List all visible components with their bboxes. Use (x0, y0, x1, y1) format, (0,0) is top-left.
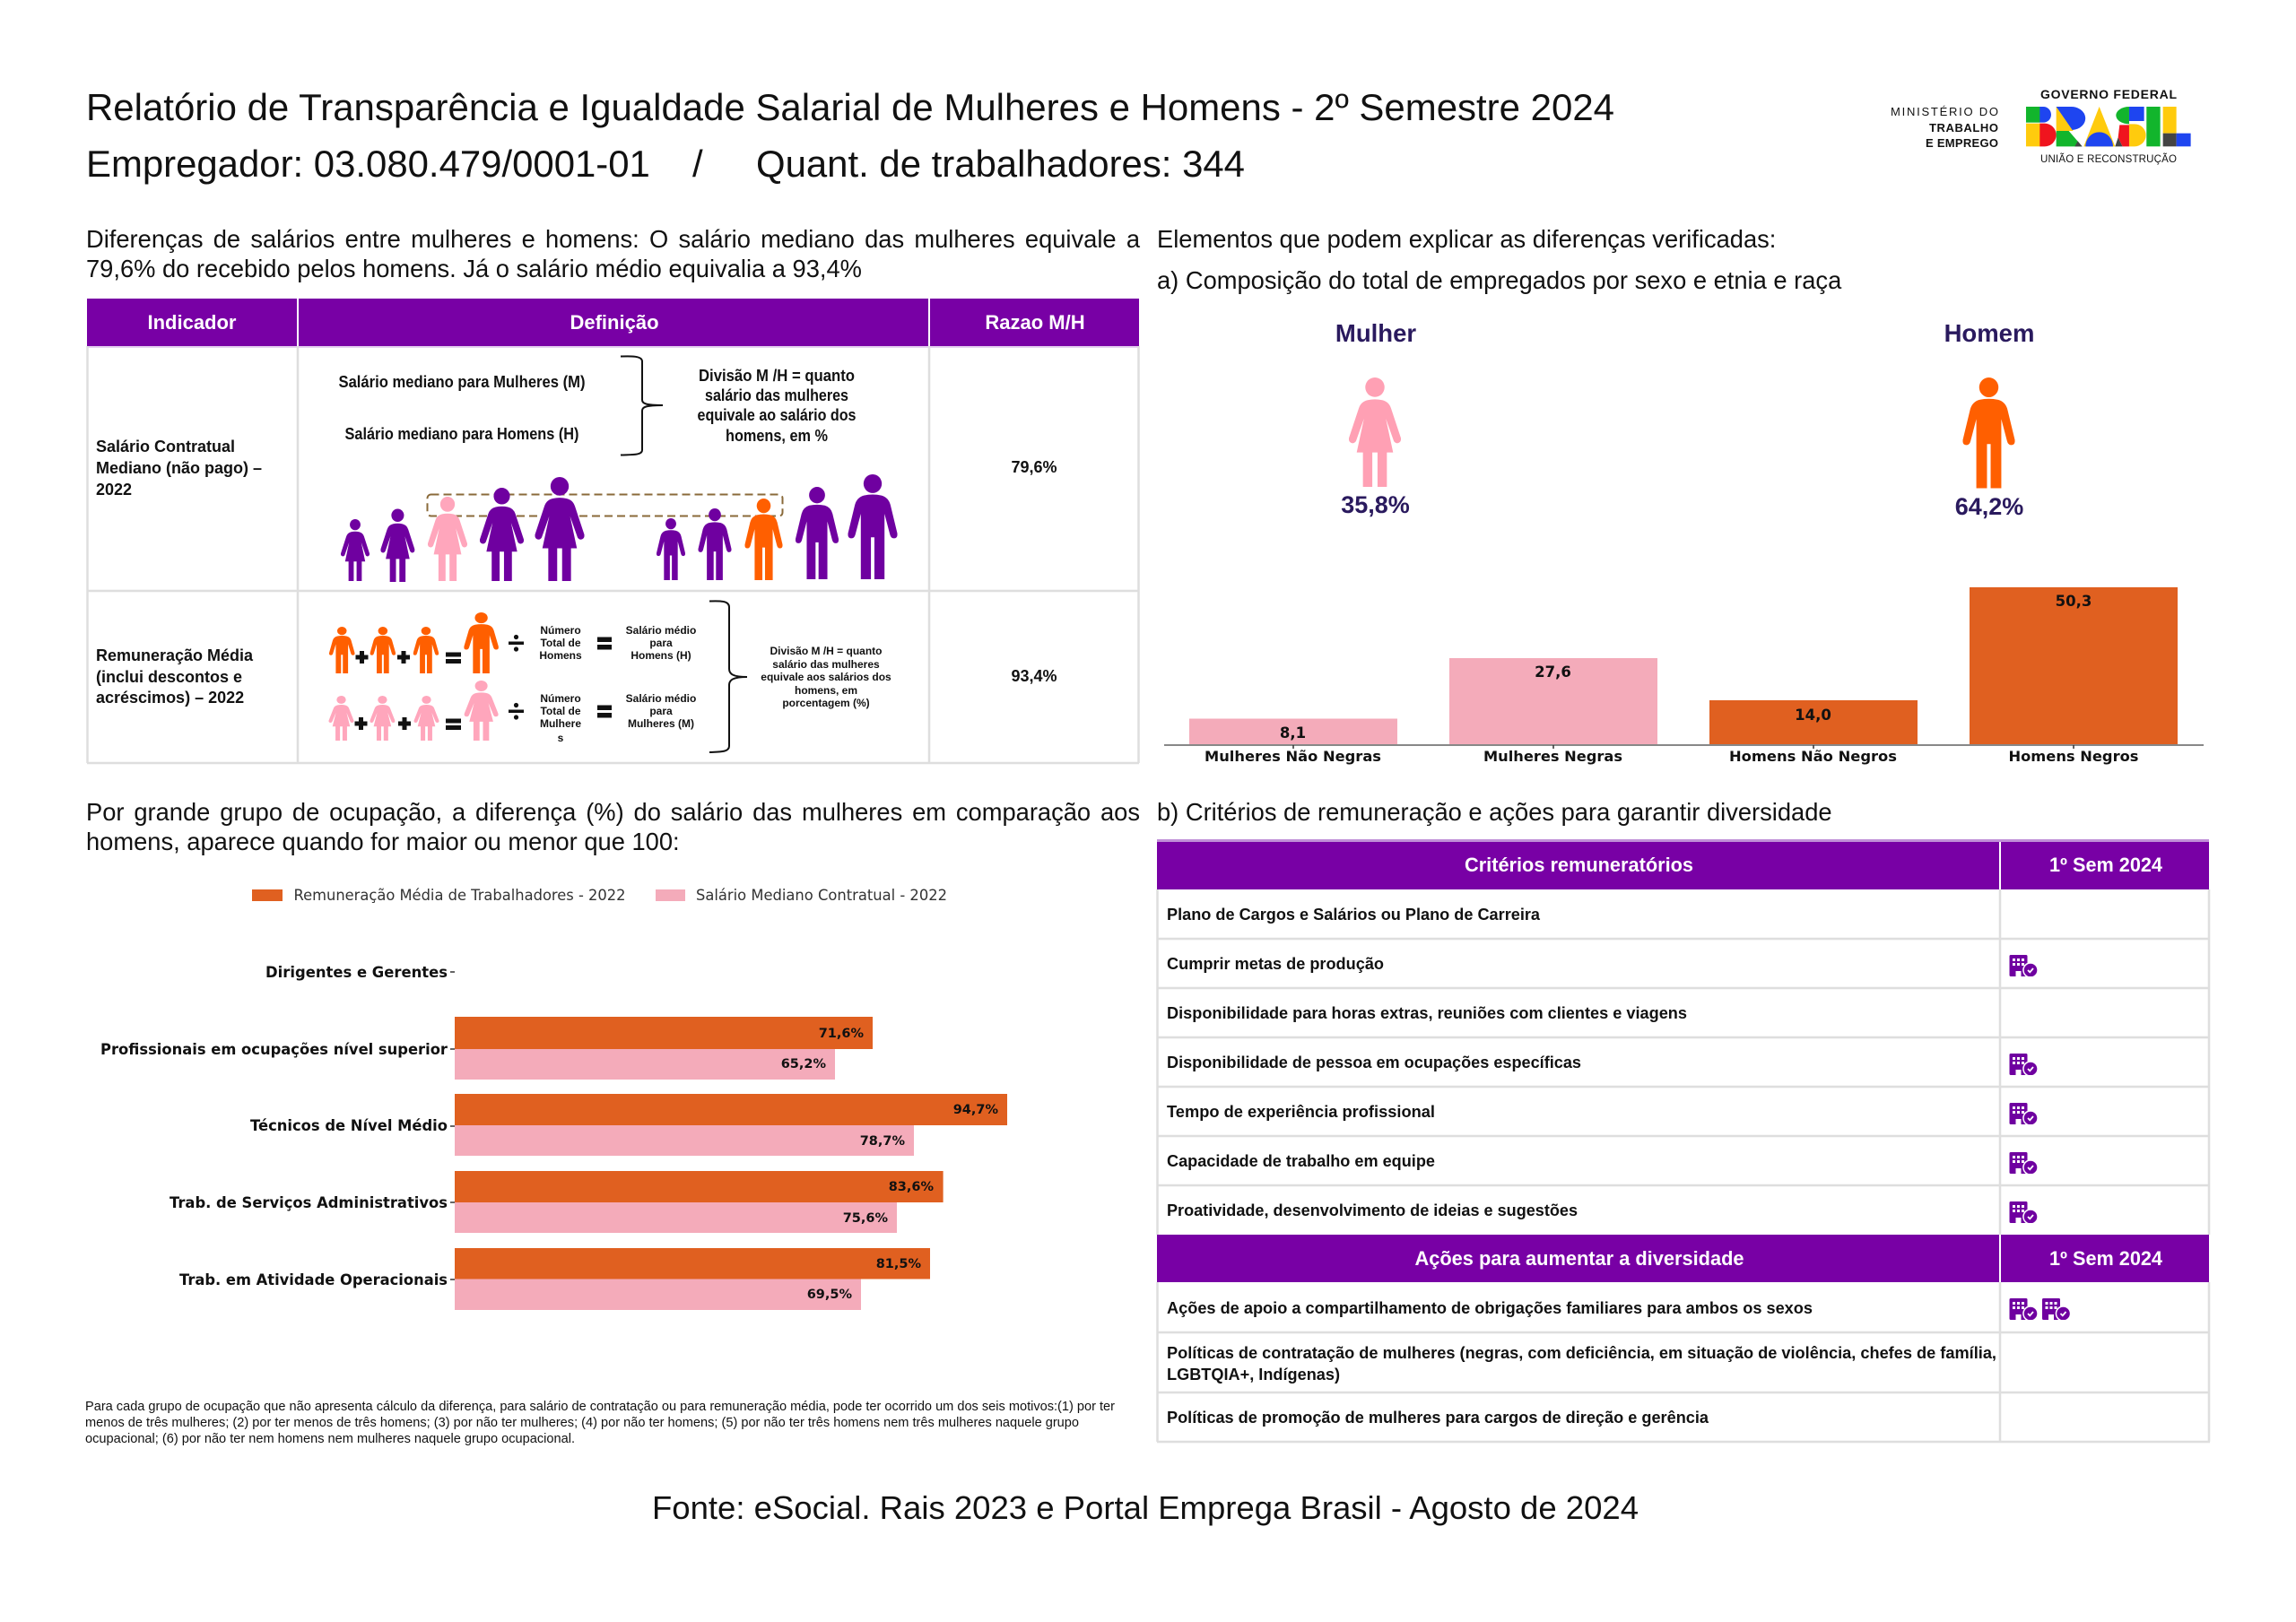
value: 93,4%: 93,4% (1011, 667, 1057, 685)
heading: composition section: a) Composição do total de empregados por sexo e etnia e raça (1157, 266, 1842, 294)
table header labels (147, 311, 1085, 334)
row label: remuneração média (96, 646, 254, 707)
horizontal bar chart: occupation groups (100, 964, 1007, 1310)
average division explanation (761, 645, 891, 709)
criteria rows: Disponibilidade de pessoa em ocupações específicas (1167, 1054, 1581, 1071)
bar chart: sex and race composition: 8,1 (1280, 724, 1306, 742)
woman pictogram and share: 35,8% (1341, 491, 1410, 518)
average: men equation: Homens (539, 649, 582, 662)
diversity rows: LGBTQIA+, Indígenas) (1167, 1366, 1340, 1383)
table: remuneration criteria and diversity actions (1157, 839, 2210, 1442)
median division explanation: salário das mulheres (705, 386, 848, 404)
average division explanation: salário das mulheres (772, 658, 880, 671)
horizontal bar chart: occupation groups: 75,6% (843, 1211, 888, 1226)
average: men equation (329, 612, 696, 673)
text block: occupation groups intro: Por grande grupo de ocupação, a diferença (%) do salário das mulheres em comparação aos homens, aparece quando for maior ou menor que 100: (86, 798, 1140, 855)
row label: salário contratual: Mediano (não pago) – (96, 459, 262, 477)
man pictogram and share: Homem (1944, 319, 2034, 347)
horizontal bar chart: occupation groups: 65,2% (781, 1057, 826, 1071)
horizontal bar chart: occupation groups: 81,5% (876, 1257, 921, 1271)
median figures: men (657, 474, 898, 580)
logo: Ministério do Trabalho e Emprego / Governo Federal Brasil: E EMPREGO (1926, 136, 1998, 150)
average division explanation: homens, em (795, 684, 857, 697)
brace: median (621, 356, 663, 455)
legend: horizontal bar chart: Salário Mediano Contratual - 2022 (696, 887, 947, 904)
bar chart: sex and race composition (1164, 587, 2204, 765)
diversity header: Ações para aumentar a diversidade (1415, 1247, 1744, 1270)
icons: company with check (2009, 955, 2071, 1322)
text block: salary differences: Diferenças de salários entre mulheres e homens: O salário mediano das mulheres equivale a 79,6% do recebido pelos homens. Já o salário médio equivalia a 93,4% (86, 225, 1140, 282)
average: men equation: Homens (H) (631, 649, 691, 662)
woman pictogram and share: Mulher (1335, 319, 1416, 347)
row label: salário contratual: Salário Contratual (96, 438, 235, 455)
bar chart: sex and race composition: Homens Não Negros (1729, 748, 1897, 765)
title (86, 86, 1614, 185)
woman pictogram and share (1335, 319, 1416, 518)
horizontal bar chart: occupation groups: Trab. de Serviços Administrativos (170, 1194, 448, 1211)
logo: Ministério do Trabalho e Emprego / Governo Federal Brasil: MINISTÉRIO DO (1891, 105, 1998, 118)
table: indicators (87, 299, 1139, 763)
horizontal bar chart: occupation groups: Trab. em Atividade Operacionais (179, 1271, 448, 1288)
median division explanation (698, 367, 856, 445)
legend: horizontal bar chart: Remuneração Média de Trabalhadores - 2022 (294, 887, 626, 904)
title: Empregador: 03.080.479/0001-01 (86, 143, 650, 185)
bar chart: sex and race composition: Homens Negros (2009, 748, 2138, 765)
criteria header (1465, 854, 2163, 876)
criteria rows: Disponibilidade para horas extras, reuniões com clientes e viagens (1167, 1004, 1687, 1022)
average: women equation: Total de (540, 705, 581, 717)
footnote: ocupacional; (6) por não ter nem homens nem mulheres naquele grupo ocupacional. (85, 1431, 575, 1446)
heading: criteria section: b) Critérios de remuneração e ações para garantir diversidade (1157, 798, 1832, 826)
average: men equation: Total de (540, 637, 581, 649)
footnote: menos de três mulheres; (2) por ter menos de três homens; (3) por não ter mulheres; (4) por não ter homens; (5) por não ter três homens nem três mulheres naquele grupo (85, 1415, 1079, 1430)
criteria header: 1º Sem 2024 (2049, 854, 2163, 876)
diversity rows: Ações de apoio a compartilhamento de obrigações familiares para ambos os sexos (1167, 1299, 1813, 1317)
average: women equation: para (649, 705, 673, 717)
average division explanation: porcentagem (%) (782, 697, 870, 709)
horizontal bar chart: occupation groups: 71,6% (819, 1027, 864, 1041)
heading: composition section: Elementos que podem explicar as diferenças verificadas: (1157, 225, 1776, 253)
source line: Fonte: eSocial. Rais 2023 e Portal Emprega Brasil - Agosto de 2024 (652, 1489, 1639, 1526)
row label: remuneração média: (inclui descontos e (96, 668, 242, 686)
median definition labels: Salário mediano para Mulheres (M) (339, 373, 585, 391)
average: women equation: Número (540, 692, 581, 705)
logo: Ministério do Trabalho e Emprego / Governo Federal Brasil: GOVERNO FEDERAL (2040, 87, 2177, 101)
criteria rows (1167, 906, 1687, 1219)
median division explanation: homens, em % (726, 427, 828, 445)
man pictogram and share (1944, 319, 2034, 520)
row label: remuneração média: acréscimos) – 2022 (96, 689, 244, 707)
average division explanation: Divisão M /H = quanto (770, 645, 883, 657)
horizontal bar chart: occupation groups: Dirigentes e Gerentes (265, 964, 448, 981)
footnote (85, 1399, 1115, 1446)
row label: salário contratual: 2022 (96, 481, 132, 499)
title: Quant. de trabalhadores: 344 (756, 143, 1245, 185)
diversity rows (1167, 1299, 1996, 1427)
horizontal bar chart: occupation groups: 69,5% (807, 1288, 852, 1302)
diversity header: 1º Sem 2024 (2049, 1247, 2163, 1270)
footnote: Para cada grupo de ocupação que não apresenta cálculo da diferença, para salário de contratação ou para remuneração média, pode ter ocorrido um dos seis motivos:(1) por ter (85, 1399, 1115, 1414)
bar chart: sex and race composition: 50,3 (2056, 593, 2092, 610)
value: 79,6%: 79,6% (1011, 458, 1057, 476)
logo: Ministério do Trabalho e Emprego / Governo Federal Brasil: TRABALHO (1929, 121, 1998, 134)
median division explanation: Divisão M /H = quanto (699, 367, 855, 385)
legend: horizontal bar chart (252, 887, 947, 904)
diversity rows: Políticas de contratação de mulheres (negras, com deficiência, em situação de violência, chefes de família, (1167, 1344, 1996, 1362)
horizontal bar chart: occupation groups: 78,7% (860, 1134, 905, 1149)
diversity header (1415, 1247, 2163, 1270)
average: men equation: Salário médio (626, 624, 696, 637)
row label: remuneração média: Remuneração Média (96, 646, 254, 664)
criteria rows: Capacidade de trabalho em equipe (1167, 1152, 1435, 1170)
bar chart: sex and race composition: 27,6 (1535, 664, 1571, 681)
bar chart: sex and race composition: 14,0 (1795, 707, 1831, 724)
average: men equation: Número (540, 624, 581, 637)
average: women equation (328, 681, 696, 744)
criteria rows: Proatividade, desenvolvimento de ideias e sugestões (1167, 1201, 1578, 1219)
table header labels: Indicador (147, 311, 237, 334)
median definition labels: Salário mediano para Homens (H) (344, 425, 579, 443)
average division explanation: equivale aos salários dos (761, 671, 891, 683)
horizontal bar chart: occupation groups: Profissionais em ocupações nível superior (100, 1041, 448, 1058)
average: women equation: Mulheres (M) (628, 717, 694, 730)
average: women equation: Salário médio (626, 692, 696, 705)
dashed box: median marker (427, 495, 782, 516)
horizontal bar chart: occupation groups: Técnicos de Nível Médio (250, 1117, 448, 1134)
average: women equation: Mulhere (540, 717, 581, 730)
criteria rows: Plano de Cargos e Salários ou Plano de Carreira (1167, 906, 1541, 924)
median division explanation: equivale ao salário dos (698, 406, 856, 424)
horizontal bar chart: occupation groups: 94,7% (953, 1103, 998, 1117)
man pictogram and share: 64,2% (1955, 493, 2023, 520)
logo: Ministério do Trabalho e Emprego / Governo Federal Brasil (1891, 87, 2191, 165)
average: women equation: s (558, 732, 564, 744)
brace: average (709, 601, 747, 752)
title: / (692, 143, 703, 185)
table header labels: Definição (570, 311, 659, 334)
row label: salário contratual (96, 438, 262, 499)
title: Relatório de Transparência e Igualdade Salarial de Mulheres e Homens - 2º Semestre 2024 (86, 86, 1614, 128)
bar chart: sex and race composition: Mulheres Não Negras (1205, 748, 1381, 765)
median definition labels (339, 373, 585, 443)
logo: Ministério do Trabalho e Emprego / Governo Federal Brasil: UNIÃO E RECONSTRUÇÃO (2040, 153, 2177, 165)
horizontal bar chart: occupation groups: 83,6% (889, 1180, 934, 1194)
bar chart: sex and race composition: Mulheres Negras (1483, 748, 1622, 765)
criteria header: Critérios remuneratórios (1465, 854, 1693, 876)
heading: composition section (1157, 225, 1842, 294)
average: men equation: para (649, 637, 673, 649)
median figures: women (341, 477, 585, 582)
criteria rows: Cumprir metas de produção (1167, 955, 1384, 973)
criteria rows: Tempo de experiência profissional (1167, 1103, 1435, 1121)
diversity rows: Políticas de promoção de mulheres para cargos de direção e gerência (1167, 1409, 1709, 1427)
table header labels: Razao M/H (985, 311, 1085, 334)
